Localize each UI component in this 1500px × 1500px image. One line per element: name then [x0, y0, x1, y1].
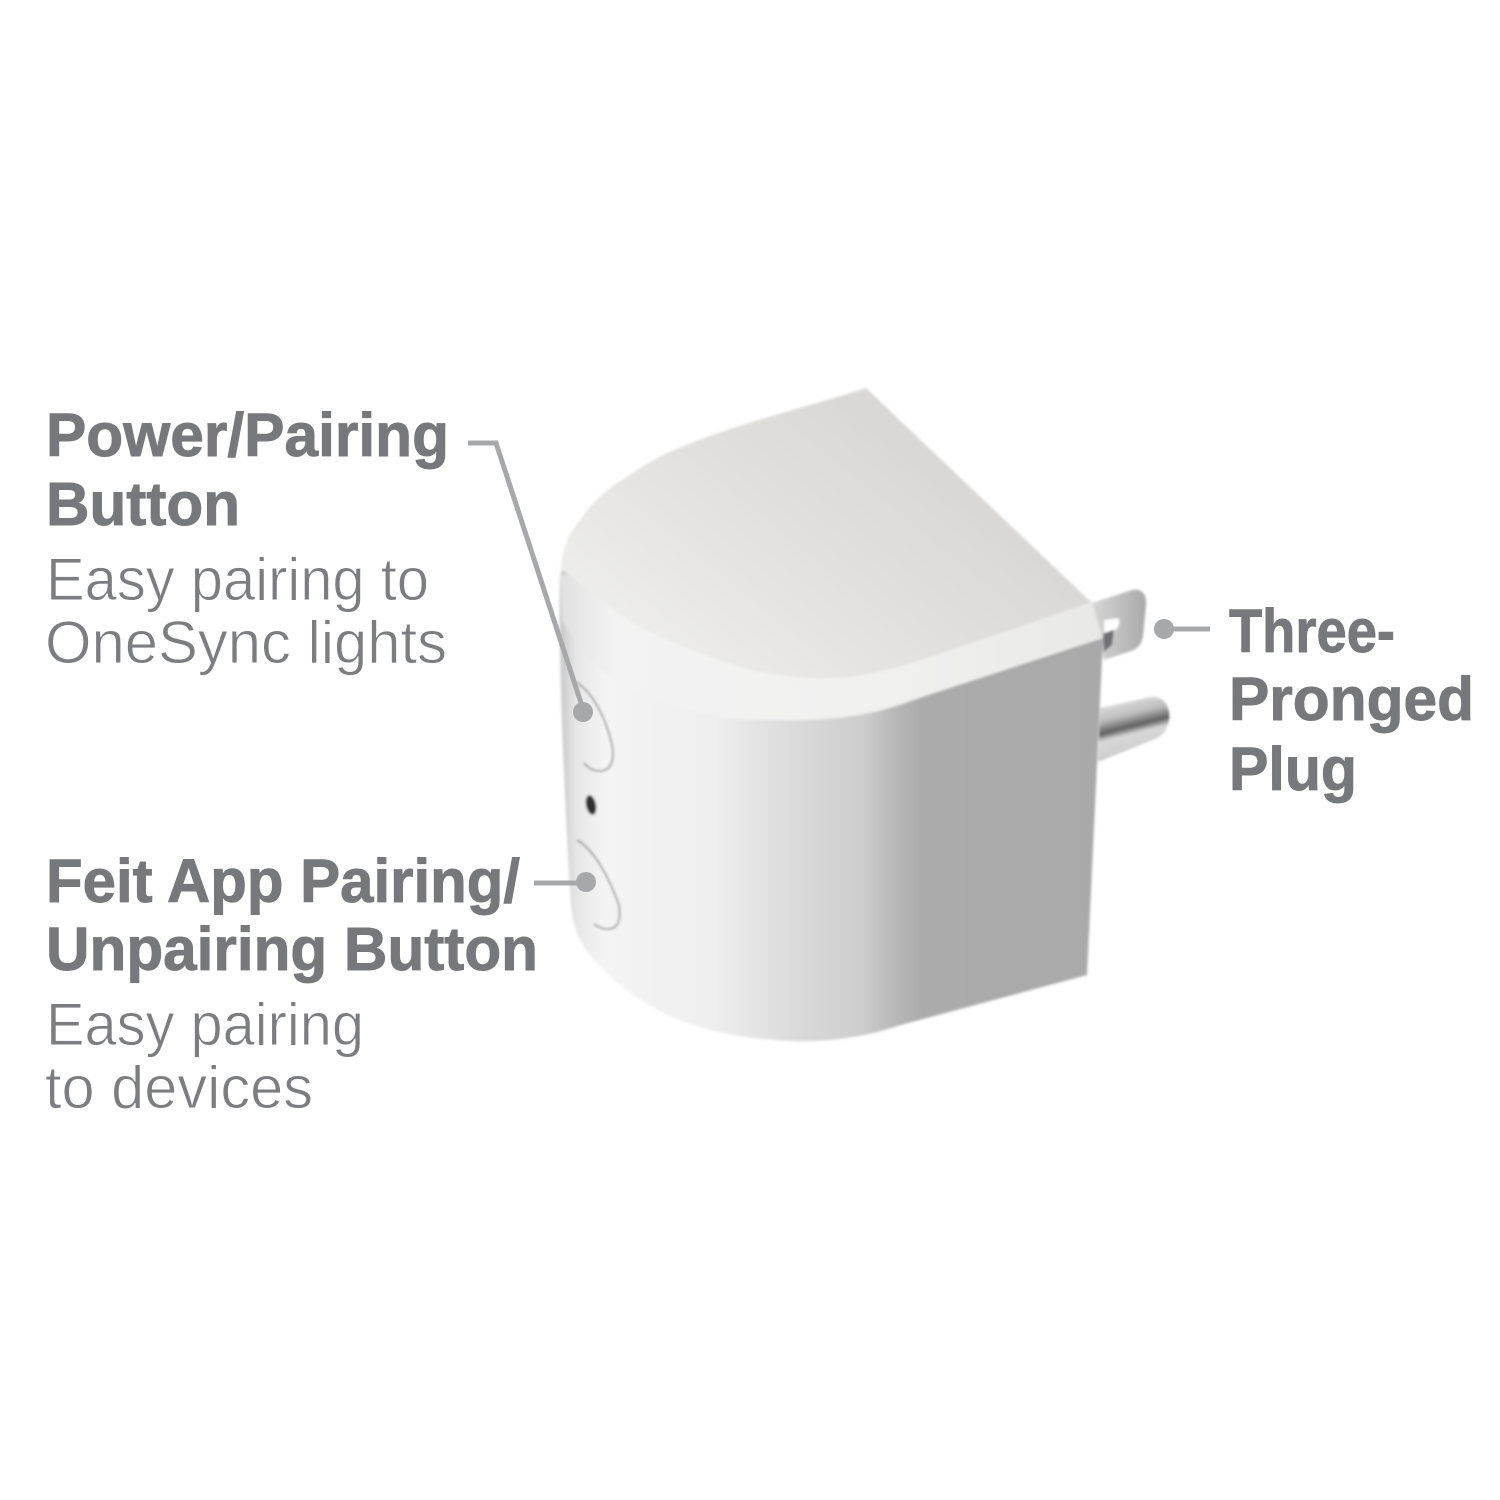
callout: plug leader — [1154, 619, 1210, 639]
ground prong — [1098, 697, 1169, 762]
label: app pairing button — [45, 847, 538, 1121]
label: power pairing button: OneSync lights — [45, 609, 447, 676]
label: power pairing button — [45, 401, 449, 676]
label: app pairing button: Feit App Pairing/ — [46, 847, 520, 915]
flat prong — [1092, 590, 1146, 660]
plug top band — [560, 560, 1103, 720]
callout: app pairing leader — [534, 872, 596, 892]
status LED — [584, 794, 598, 816]
upper button outline — [576, 682, 613, 771]
product: smart plug — [560, 388, 1169, 1041]
label: power pairing button: Button — [46, 470, 240, 538]
label: app pairing button: to devices — [45, 1054, 313, 1121]
label: three-pronged plug — [1229, 597, 1474, 803]
callout: power pairing leader — [468, 443, 593, 722]
label: power pairing button: Easy pairing to — [46, 546, 429, 613]
plug side body — [560, 570, 1103, 1041]
lower button outline — [577, 840, 620, 929]
label: app pairing button: Unpairing Button — [46, 915, 538, 983]
label: three-pronged plug: Three- — [1229, 597, 1395, 665]
label: app pairing button: Easy pairing — [46, 991, 364, 1058]
label: power pairing button: Power/Pairing — [46, 401, 449, 469]
label: three-pronged plug: Pronged — [1229, 665, 1474, 733]
label: three-pronged plug: Plug — [1229, 735, 1357, 803]
plug top face — [561, 388, 1091, 679]
prong slot shadow — [1103, 630, 1114, 652]
